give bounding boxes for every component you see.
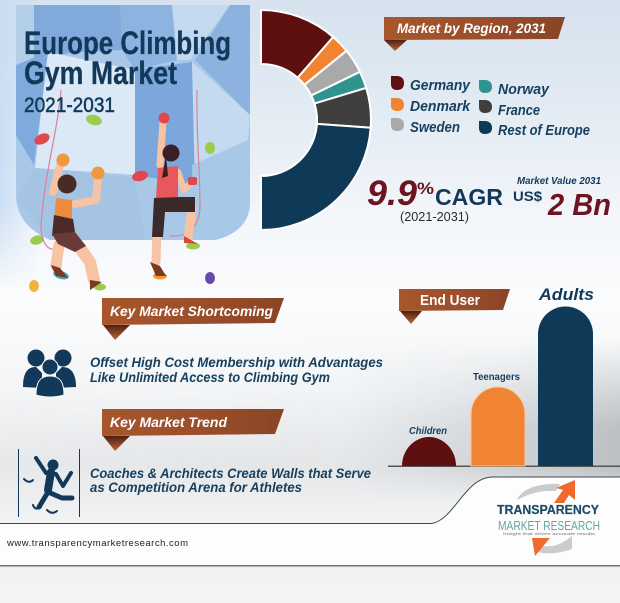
donut chart: market by region xyxy=(261,10,371,230)
text: key market trend: Coaches & Architects Create Walls that Serve xyxy=(90,466,371,481)
legend item: Norway xyxy=(479,80,550,98)
climber: orange xyxy=(51,154,104,290)
logo: Transparency Market Research xyxy=(497,480,600,556)
market value stat: US$ xyxy=(513,188,542,204)
legend item: Denmark: Denmark xyxy=(410,99,471,115)
website url: www.transparencymarketresearch.com xyxy=(6,538,188,549)
text: key market trend xyxy=(90,466,371,495)
text: key market shortcoming: Like Unlimited Access to Climbing Gym xyxy=(90,370,330,385)
holds xyxy=(29,113,215,292)
segment: Sweden xyxy=(304,51,360,96)
ribbon: Market by Region xyxy=(384,17,565,51)
legend item: France xyxy=(479,100,540,119)
segment: Norway xyxy=(311,72,366,104)
text: key market shortcoming xyxy=(90,355,383,385)
legend item: Rest of Europe xyxy=(479,121,590,139)
climbing wall illustration xyxy=(16,5,250,292)
segment: Denmark xyxy=(298,37,346,85)
bar: Teenagers: Teenagers xyxy=(473,372,520,383)
ribbon: End User: End User xyxy=(420,293,480,309)
legend item: Germany: Germany xyxy=(410,78,471,94)
bar: Teenagers xyxy=(471,372,525,466)
logo: Transparency Market Research: TRANSPARENCY xyxy=(497,502,599,517)
market value stat: Market Value 2031 xyxy=(517,176,601,187)
title: Gym Market xyxy=(24,55,177,91)
title: 2021-2031 xyxy=(24,94,115,117)
logo: Transparency Market Research: MARKET RESEARCH xyxy=(498,519,600,533)
CAGR stat: 9.9 xyxy=(367,174,418,213)
ribbon: Key Market Shortcoming: Key Market Shortcoming xyxy=(110,303,273,319)
ribbon: Key Market Trend xyxy=(102,409,284,451)
CAGR stat: CAGR xyxy=(435,184,503,210)
legend item: France: France xyxy=(498,103,540,119)
legend xyxy=(391,76,590,139)
ribbon: Key Market Trend: Key Market Trend xyxy=(110,414,227,430)
legend item: Germany xyxy=(391,76,471,94)
legend item: Sweden: Sweden xyxy=(410,120,460,136)
ribbon: Market by Region: Market by Region, 2031 xyxy=(397,21,546,36)
bar: Adults xyxy=(538,285,594,466)
market value stat: 2 Bn xyxy=(547,187,611,222)
logo: Transparency Market Research: Insight that drives accurate results xyxy=(503,531,595,536)
CAGR stat: % xyxy=(417,179,434,198)
segment: Rest of Europe xyxy=(261,124,371,230)
text: key market shortcoming: Offset High Cost Membership with Advantages xyxy=(90,355,383,370)
segment: Germany xyxy=(261,10,333,78)
legend item: Sweden xyxy=(391,118,460,136)
bar chart: end user xyxy=(388,285,620,467)
CAGR stat: (2021-2031) xyxy=(400,210,469,224)
bar: Children: Children xyxy=(409,426,447,437)
climber: red xyxy=(150,112,198,276)
bar: Children xyxy=(402,426,456,466)
ribbon: Key Market Shortcoming xyxy=(102,298,284,340)
market value stat xyxy=(513,176,611,222)
title xyxy=(24,25,231,117)
title: Europe Climbing xyxy=(24,25,231,61)
text: key market trend: as Competition Arena for Athletes xyxy=(90,480,302,495)
ribbon: End User xyxy=(399,289,510,324)
bar: Adults: Adults xyxy=(538,285,594,304)
segment: France xyxy=(314,88,371,128)
CAGR stat xyxy=(367,174,503,224)
icon: group of people xyxy=(23,350,76,397)
legend item: Rest of Europe: Rest of Europe xyxy=(498,123,590,139)
legend item: Norway: Norway xyxy=(498,82,550,98)
ropes xyxy=(41,90,200,249)
icon: climber silhouette xyxy=(18,449,80,517)
